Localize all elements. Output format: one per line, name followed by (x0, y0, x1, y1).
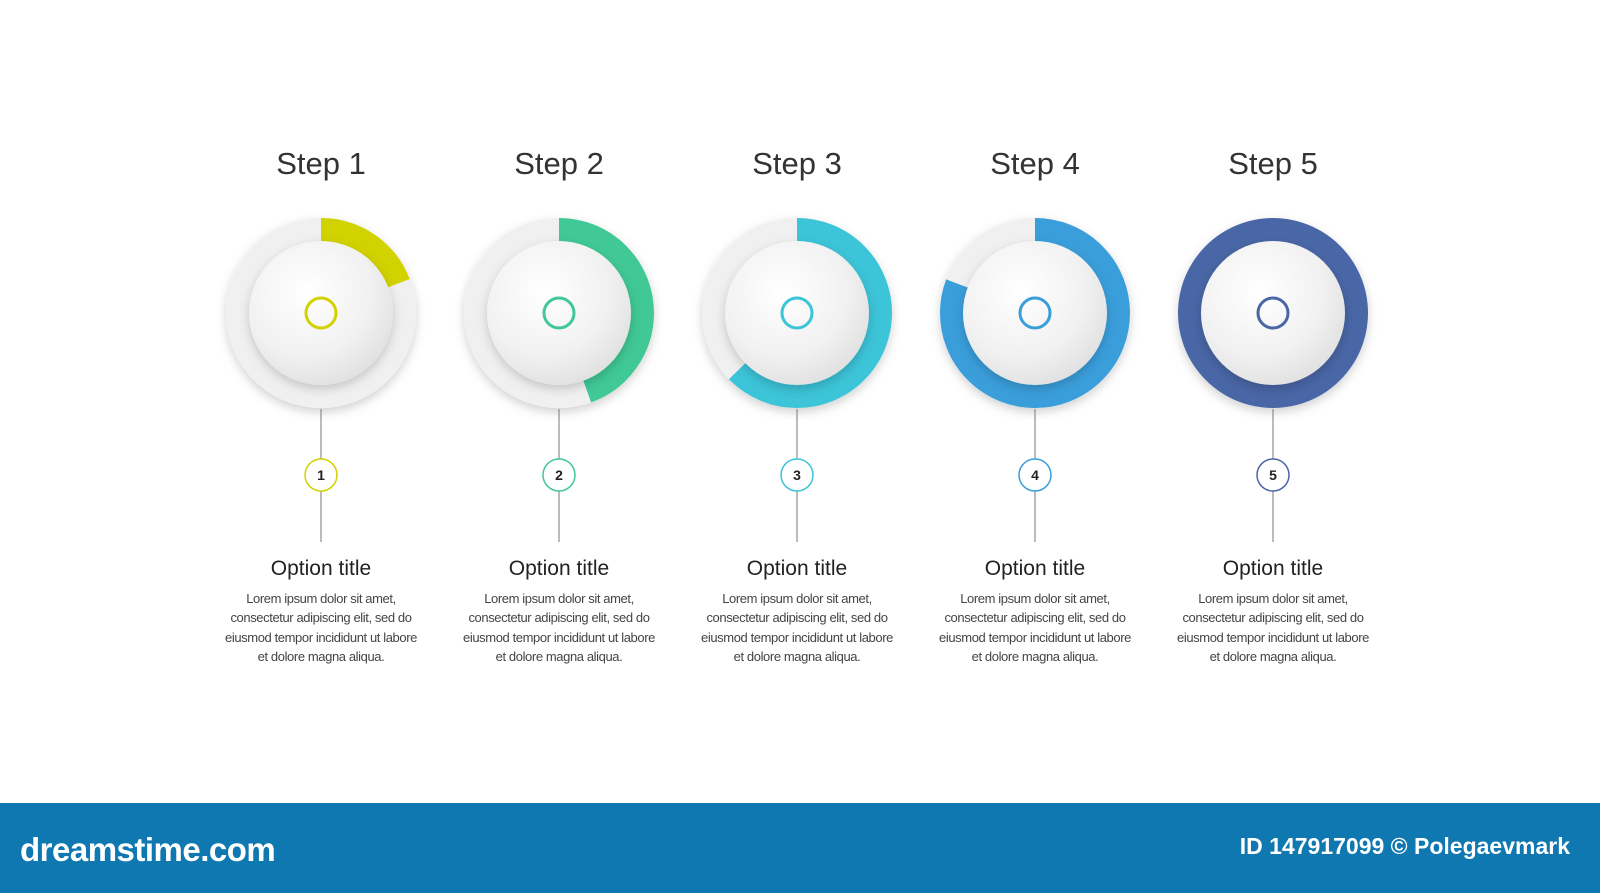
step 4: Lorem ipsum dolor sit amet, (960, 591, 1110, 606)
step 4 (939, 146, 1131, 664)
step 3 (701, 146, 893, 664)
step 5: consectetur adipiscing elit, sed do (1182, 610, 1364, 625)
step 4: 4 (1031, 467, 1039, 483)
step 1: 1 (317, 467, 325, 483)
step 2: Option title (509, 557, 609, 580)
step 2: 2 (555, 467, 563, 483)
footer logo: dreamstime.com (20, 831, 275, 868)
step 4: et dolore magna aliqua. (972, 649, 1098, 664)
step 2: Step 2 (514, 146, 604, 181)
step 1: et dolore magna aliqua. (258, 649, 384, 664)
step 1: Option title (271, 557, 371, 580)
step 3: 3 (793, 467, 801, 483)
step 3: Option title (747, 557, 847, 580)
step 4: eiusmod tempor incididunt ut labore (939, 630, 1131, 645)
step 1 (225, 146, 417, 664)
step 4: Option title (985, 557, 1085, 580)
step 1: consectetur adipiscing elit, sed do (230, 610, 412, 625)
step 2: eiusmod tempor incididunt ut labore (463, 630, 655, 645)
step 5: Option title (1223, 557, 1323, 580)
step 4: Step 4 (990, 146, 1080, 181)
footer credit: ID 147917099 © Polegaevmark (1240, 833, 1570, 859)
step 5 (1177, 146, 1369, 664)
step 4: consectetur adipiscing elit, sed do (944, 610, 1126, 625)
step 3: Step 3 (752, 146, 842, 181)
step 3: Lorem ipsum dolor sit amet, (722, 591, 872, 606)
step 2: et dolore magna aliqua. (496, 649, 622, 664)
step 5: Step 5 (1228, 146, 1318, 181)
step 5: et dolore magna aliqua. (1210, 649, 1336, 664)
step 2 (463, 146, 655, 664)
step 5: eiusmod tempor incididunt ut labore (1177, 630, 1369, 645)
step 3: et dolore magna aliqua. (734, 649, 860, 664)
step 2: consectetur adipiscing elit, sed do (468, 610, 650, 625)
footer bar (0, 803, 1600, 893)
step 1: Lorem ipsum dolor sit amet, (246, 591, 396, 606)
step 5: Lorem ipsum dolor sit amet, (1198, 591, 1348, 606)
step 1: eiusmod tempor incididunt ut labore (225, 630, 417, 645)
step 3: consectetur adipiscing elit, sed do (706, 610, 888, 625)
step 1: Step 1 (276, 146, 366, 181)
step 3: eiusmod tempor incididunt ut labore (701, 630, 893, 645)
step 5: 5 (1269, 467, 1277, 483)
step 2: Lorem ipsum dolor sit amet, (484, 591, 634, 606)
